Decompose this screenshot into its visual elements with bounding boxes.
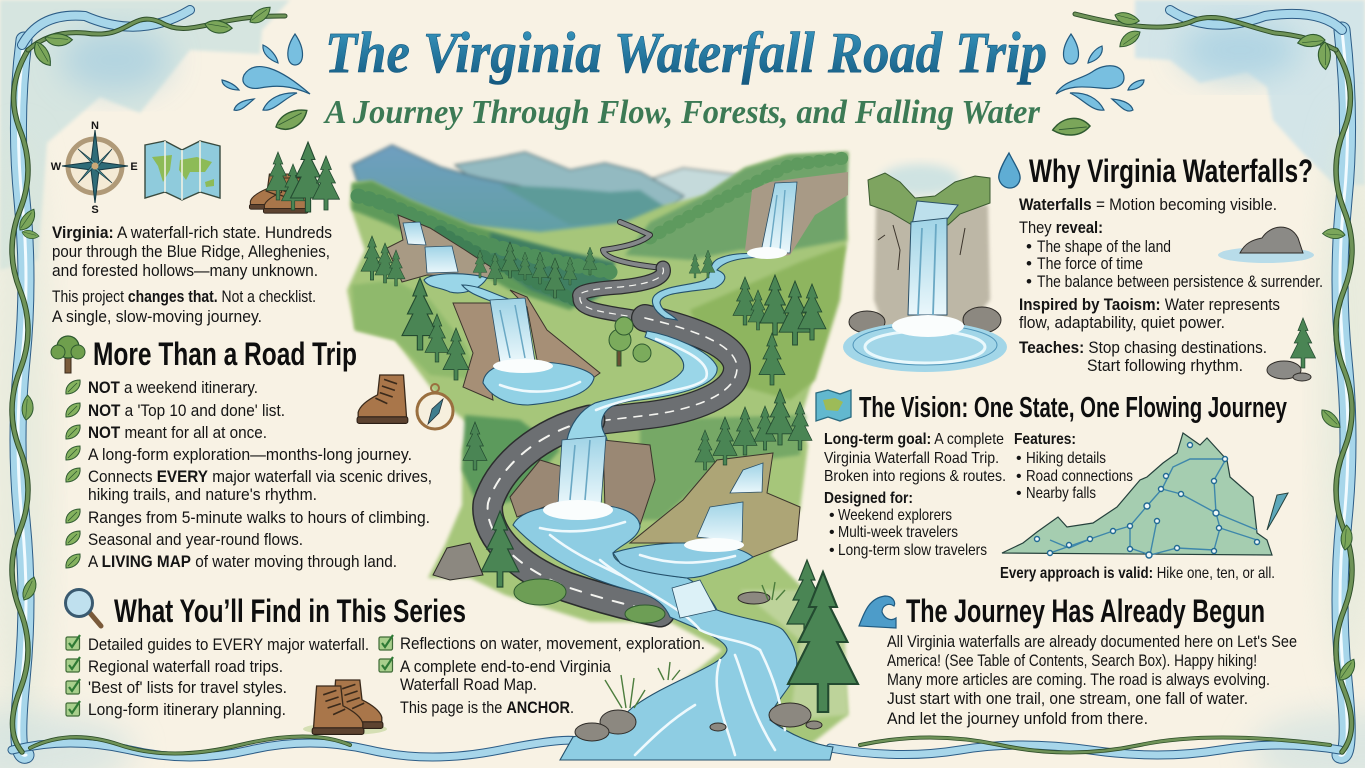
icon: pair of boots xyxy=(303,680,387,735)
checklist: NOT a 'Top 10 and done' list. xyxy=(88,401,285,420)
hill shading xyxy=(352,152,848,720)
panel: What You'll Find in This Series xyxy=(66,590,705,735)
body text: America! (See Table of Contents, Search Box). Happy hiking! xyxy=(887,651,1257,670)
body text xyxy=(887,632,1297,728)
waterfall: upper left xyxy=(403,222,458,273)
panel: The Vision xyxy=(816,390,1288,582)
panel: Why Virginia Waterfalls? xyxy=(843,153,1323,381)
body text: Many more articles are coming. The road is always evolving. xyxy=(887,670,1270,689)
icon: water drop xyxy=(999,153,1020,188)
title: The Virginia Waterfall Road Trip xyxy=(325,20,1047,85)
icon: tree xyxy=(51,336,85,373)
icon: rock in ripples xyxy=(1218,227,1314,263)
waterfall: upper right xyxy=(747,182,797,259)
goal text: • xyxy=(829,542,835,559)
checklist xyxy=(66,378,432,571)
right checklist: Reflections on water, movement, exploration. xyxy=(400,634,705,653)
features text: • xyxy=(1016,450,1022,467)
icon: pocket compass xyxy=(417,384,453,429)
caption: Every approach is valid: Hike one, ten, or all. xyxy=(1000,565,1275,582)
right checklist: Waterfall Road Map. xyxy=(400,675,537,694)
goal text xyxy=(824,431,1006,559)
body text: Inspired by Taoism: Water represents xyxy=(1019,295,1280,314)
goal text: Broken into regions & routes. xyxy=(824,468,1006,485)
body text: Waterfalls = Motion becoming visible. xyxy=(1019,195,1277,214)
Virginia route map xyxy=(1002,433,1288,558)
river bank xyxy=(635,665,718,710)
body text: Teaches: Stop chasing destinations. xyxy=(1019,338,1267,357)
green valley land xyxy=(347,152,848,745)
body text: All Virginia waterfalls are already documented here on Let's See xyxy=(887,632,1297,651)
left checklist: Detailed guides to EVERY major waterfall. xyxy=(88,635,369,654)
subtitle: A Journey Through Flow, Forests, and Falling Water xyxy=(323,94,1041,131)
left checklist xyxy=(66,635,369,719)
road xyxy=(488,222,737,612)
intro text: A single, slow-moving journey. xyxy=(52,307,262,326)
features text: • xyxy=(1016,468,1022,485)
heading: What You’ll Find in This Series xyxy=(114,593,466,629)
icon: compass rose: E xyxy=(130,161,138,173)
central illustration: valley scene xyxy=(347,145,858,760)
left checklist: Regional waterfall road trips. xyxy=(88,657,283,676)
panel: Virginia intro xyxy=(52,223,332,326)
intro text: and forested hollows—many unknown. xyxy=(52,261,318,280)
icon: map xyxy=(816,390,851,421)
body text: The force of time xyxy=(1037,254,1143,273)
waterfall: center left xyxy=(490,298,553,373)
checklist: Seasonal and year-round flows. xyxy=(88,530,303,549)
river highlights xyxy=(500,339,785,755)
features text: Features: xyxy=(1014,431,1076,448)
icon: pine and rocks xyxy=(1267,318,1316,381)
icon: boots and pines xyxy=(249,142,340,213)
icon: title leaves xyxy=(274,108,1091,139)
intro text xyxy=(52,223,332,326)
checklist: A LIVING MAP of water moving through land. xyxy=(88,552,397,571)
grass tufts xyxy=(605,582,785,708)
icon: compass rose: W xyxy=(51,161,62,173)
checklist: A long-form exploration—months-long journey. xyxy=(88,445,412,464)
features text: Nearby falls xyxy=(1026,485,1096,502)
goal text: Weekend explorers xyxy=(838,507,952,524)
body text: They reveal: xyxy=(1019,218,1103,237)
heading: More Than a Road Trip xyxy=(93,336,357,372)
icon: left water splash xyxy=(222,34,310,110)
waterfall: central main xyxy=(543,436,613,520)
body text: flow, adaptability, quiet power. xyxy=(1019,313,1225,332)
boulders xyxy=(433,543,822,741)
icon: compass rose xyxy=(51,120,138,216)
broadleaf trees xyxy=(514,317,665,623)
goal text: • xyxy=(829,507,835,524)
icon: wave xyxy=(859,596,896,628)
cliffs xyxy=(387,172,848,557)
checklist: NOT a weekend itinerary. xyxy=(88,378,258,397)
icon: compass rose: S xyxy=(91,204,99,216)
features text: • xyxy=(1016,485,1022,502)
icon: right water splash xyxy=(1056,34,1144,111)
goal text: Designed for: xyxy=(824,490,913,507)
hiking boot xyxy=(357,375,408,423)
checklist: Connects EVERY major waterfall via scenic drives, xyxy=(88,467,432,486)
body text: Start following rhythm. xyxy=(1087,356,1243,375)
right checklist: A complete end-to-end Virginia xyxy=(400,657,611,676)
icon: compass rose: N xyxy=(91,120,99,132)
intro text: Virginia: A waterfall-rich state. Hundreds xyxy=(52,223,332,242)
body text xyxy=(1019,195,1323,375)
far mountains xyxy=(352,145,780,245)
body text: • xyxy=(1026,254,1032,273)
goal text: Virginia Waterfall Road Trip. xyxy=(824,450,999,467)
cascade xyxy=(672,580,716,618)
intro text: This project changes that. Not a checklist. xyxy=(52,287,316,306)
body text: And let the journey unfold from there. xyxy=(887,709,1148,728)
icon: magnifying glass xyxy=(66,590,101,626)
goal text: • xyxy=(829,524,835,541)
features text xyxy=(1014,431,1133,502)
features text: Road connections xyxy=(1026,468,1133,485)
pine trees xyxy=(361,236,858,712)
intro text: pour through the Blue Ridge, Alleghenies, xyxy=(52,242,330,261)
icon: folded world map xyxy=(145,141,220,200)
body text: • xyxy=(1026,237,1032,256)
features text: Hiking details xyxy=(1026,450,1106,467)
body text: Just start with one trail, one stream, one fall of water. xyxy=(887,689,1248,708)
panel: The Journey Has Already Begun xyxy=(859,593,1297,728)
body text: • xyxy=(1026,272,1032,291)
checklist: hiking trails, and nature's rhythm. xyxy=(88,485,317,504)
right checklist: This page is the ANCHOR. xyxy=(400,698,574,717)
checklist: NOT meant for all at once. xyxy=(88,423,267,442)
goal text: Multi-week travelers xyxy=(838,524,958,541)
checklist: Ranges from 5-minute walks to hours of climbing. xyxy=(88,508,430,527)
goal text: Long-term slow travelers xyxy=(838,542,987,559)
left checklist: Long-form itinerary planning. xyxy=(88,700,286,719)
right checklist xyxy=(379,634,705,717)
left checklist: 'Best of' lists for travel styles. xyxy=(88,678,287,697)
goal text: Long-term goal: A complete xyxy=(824,431,1004,448)
rivers xyxy=(424,254,833,760)
illustration: waterfall vignette xyxy=(843,164,1007,372)
body text: The shape of the land xyxy=(1037,237,1171,256)
forest canopy xyxy=(358,158,845,300)
panel: More Than a Road Trip xyxy=(51,336,432,571)
waterfall: lower right xyxy=(684,463,763,552)
